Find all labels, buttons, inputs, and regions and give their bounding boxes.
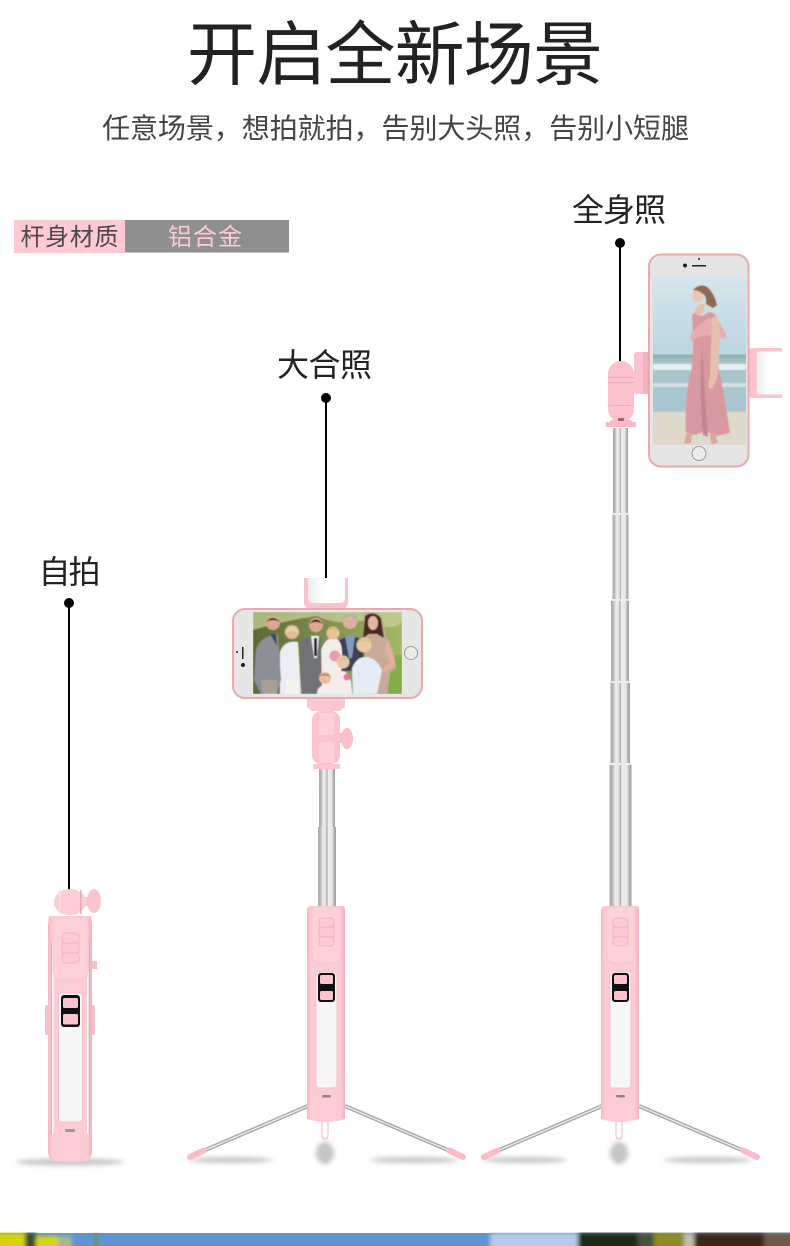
ball joint bbox=[54, 889, 101, 915]
right clamp bbox=[748, 348, 782, 398]
group photo bbox=[253, 612, 402, 698]
selfie stick folded bbox=[16, 889, 124, 1166]
man in grey suit 1 bbox=[254, 634, 281, 694]
phone: landscape bbox=[233, 609, 422, 698]
material tag bbox=[14, 220, 289, 253]
woman in pink dress bbox=[686, 312, 730, 436]
handle body bbox=[601, 906, 639, 1122]
light strip bbox=[610, 972, 631, 1088]
shadow bbox=[16, 1158, 124, 1166]
button panel bbox=[53, 918, 88, 980]
selfie stick with tripod: right bbox=[483, 428, 757, 1164]
boy bbox=[352, 657, 382, 694]
bride bbox=[319, 638, 342, 694]
top clamp bbox=[304, 578, 348, 609]
phone holder: landscape bbox=[304, 578, 353, 769]
left clamp bbox=[634, 352, 650, 394]
man in grey suit 2 bbox=[301, 637, 322, 694]
telescopic pole bbox=[609, 428, 632, 909]
woman in white bbox=[280, 642, 301, 694]
handle body bbox=[48, 916, 92, 1162]
port bbox=[616, 1095, 625, 1098]
side tabs bbox=[45, 961, 97, 1035]
port bbox=[65, 1129, 75, 1132]
small girl bbox=[316, 686, 323, 694]
material tag: 铝合金 bbox=[168, 224, 242, 251]
home button bbox=[404, 646, 418, 660]
button panel bbox=[312, 907, 341, 963]
pointer: full body bbox=[615, 238, 625, 363]
swivel joint bbox=[312, 711, 353, 769]
light strip bbox=[58, 993, 82, 1122]
button panel bbox=[606, 907, 635, 963]
material tag: 杆身材质 bbox=[20, 224, 118, 251]
black window bbox=[318, 973, 335, 1002]
swivel joint bbox=[606, 361, 636, 427]
camera and speaker bbox=[683, 258, 706, 268]
beach photo bbox=[653, 276, 746, 445]
woman in beige bbox=[363, 612, 396, 698]
remote buttons bbox=[613, 918, 628, 946]
remote buttons bbox=[62, 933, 79, 963]
label: selfie: 自拍 bbox=[38, 554, 100, 590]
tripod legs bbox=[190, 1106, 463, 1157]
pointer: group photo bbox=[321, 393, 331, 579]
pointer: selfie bbox=[64, 598, 74, 891]
remote buttons bbox=[319, 918, 334, 946]
label: full body: 全身照 bbox=[572, 192, 666, 228]
black window bbox=[612, 973, 629, 1002]
selfie stick with tripod: middle bbox=[189, 769, 463, 1164]
next section photo strip bbox=[0, 1233, 790, 1246]
black window bbox=[61, 995, 80, 1027]
subtitle: 任意场景，想拍就拍，告别大头照，告别小短腿 bbox=[102, 113, 689, 144]
handle body bbox=[307, 906, 345, 1122]
port bbox=[322, 1095, 331, 1098]
rails bbox=[51, 942, 90, 1134]
lanyard bbox=[616, 1122, 622, 1139]
phone holder: portrait bbox=[606, 348, 782, 427]
girl bbox=[339, 670, 353, 694]
home button bbox=[692, 446, 706, 460]
ground shadows bbox=[189, 1142, 458, 1164]
bottom clamp bbox=[307, 698, 345, 711]
title: 开启全新场景 bbox=[187, 16, 603, 94]
label: group photo: 大合照 bbox=[277, 347, 372, 383]
telescopic pole bbox=[318, 769, 336, 909]
light strip bbox=[316, 972, 337, 1088]
tripod legs bbox=[484, 1106, 757, 1157]
ground shadows bbox=[483, 1142, 752, 1164]
speaker bbox=[236, 647, 245, 667]
phone: portrait bbox=[649, 254, 748, 466]
man in navy bbox=[339, 637, 366, 671]
lanyard bbox=[322, 1122, 328, 1139]
